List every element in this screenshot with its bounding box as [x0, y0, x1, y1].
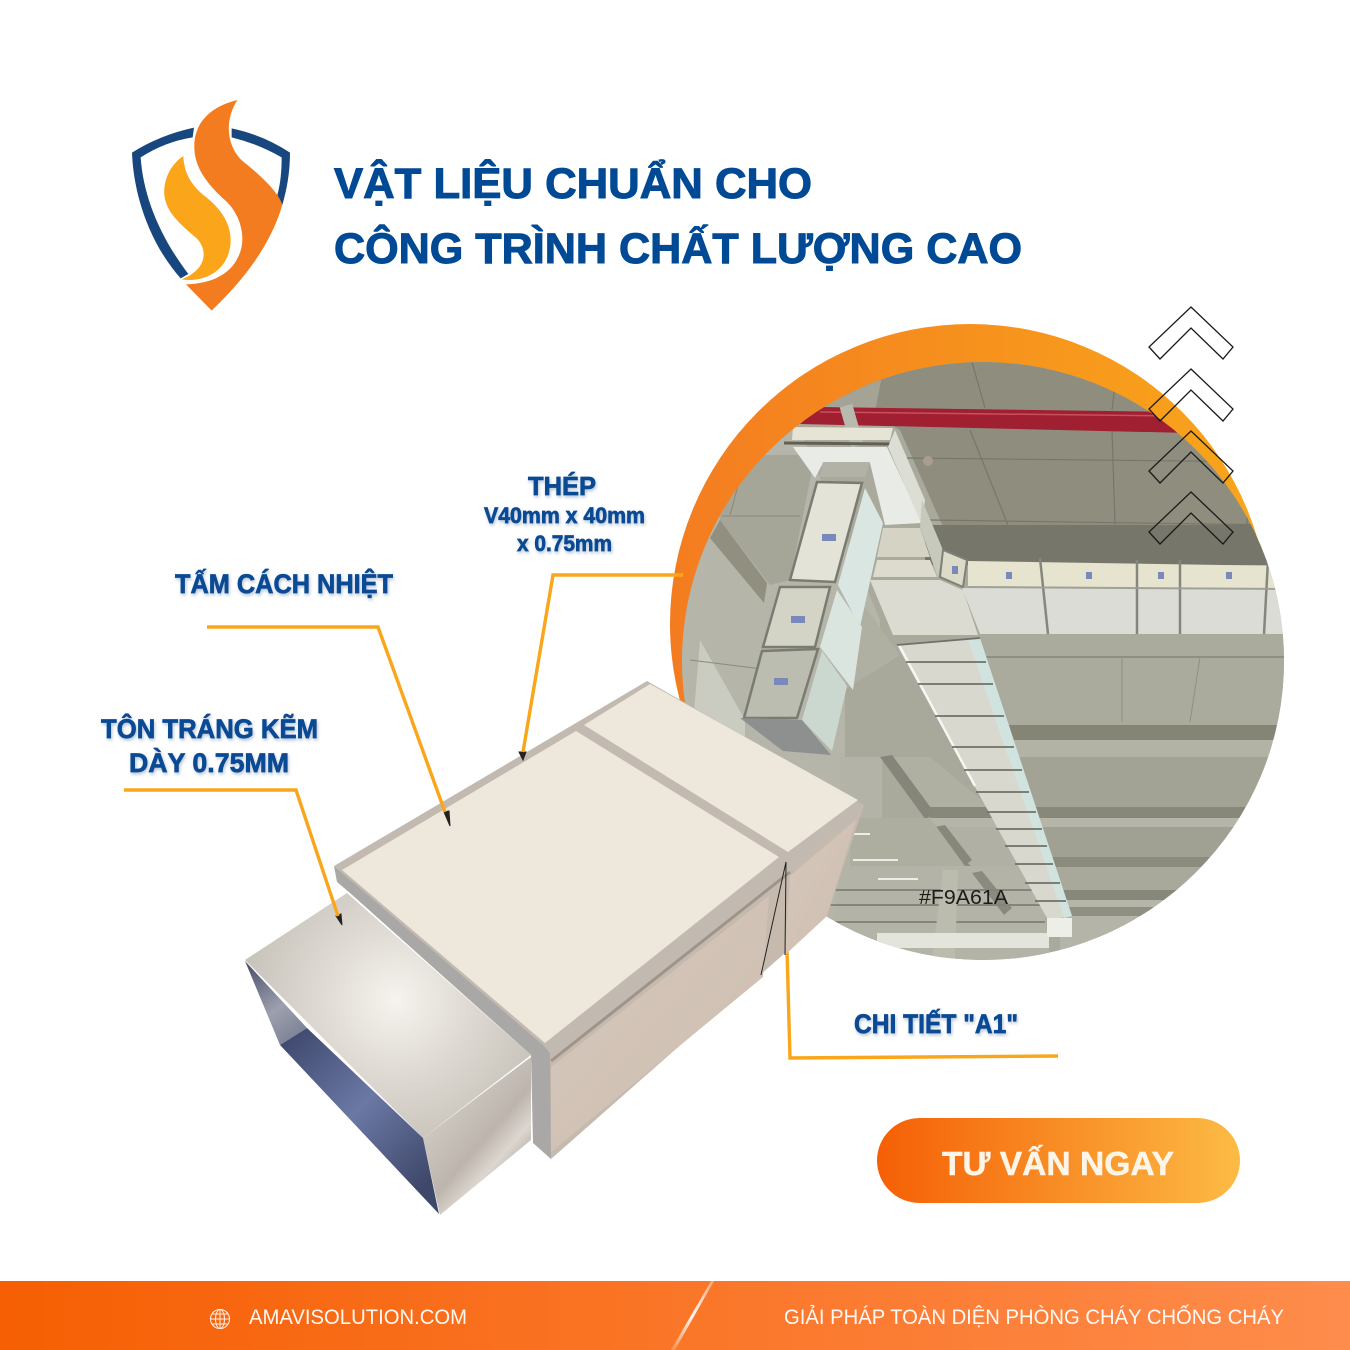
vertical duct segments — [790, 482, 862, 582]
box side panels — [551, 896, 769, 1152]
box side underlay — [543, 805, 864, 1159]
box insulation panel front — [342, 731, 779, 1043]
icon: globe — [210, 1310, 230, 1328]
inner metal duct side — [423, 1057, 531, 1215]
label: tam cach nhiet: TẤM CÁCH NHIỆT — [175, 568, 393, 599]
duct illustration — [245, 681, 864, 1215]
label: thep: V40mm x 40mm — [484, 503, 645, 528]
title — [334, 159, 1022, 273]
pointers — [336, 752, 786, 975]
label: thep: THÉP — [528, 471, 596, 501]
long diagonal duct — [897, 638, 1072, 920]
colour code text: #F9A61A — [919, 887, 1009, 909]
logo — [132, 100, 290, 311]
footer slash — [671, 1281, 714, 1350]
logo shield — [132, 128, 290, 278]
label: ton trang kem — [101, 713, 318, 778]
box end strip — [334, 866, 551, 1159]
inner metal duct bottom wall — [280, 1028, 439, 1214]
label: chi tiet A1: CHI TIẾT "A1" — [854, 1008, 1018, 1039]
left concrete — [670, 430, 880, 960]
button — [877, 1118, 1240, 1203]
label: thep: x 0.75mm — [517, 531, 612, 556]
ceiling upper — [842, 362, 1268, 564]
junction duct — [870, 580, 978, 635]
title: CÔNG TRÌNH CHẤT LƯỢNG CAO — [334, 224, 1022, 273]
logo flame orange — [186, 100, 282, 311]
inner metal duct top — [245, 893, 531, 1138]
foil wrap — [740, 718, 831, 755]
footer website: AMAVISOLUTION.COM — [249, 1306, 467, 1329]
site photo — [670, 350, 1305, 970]
fire pipe — [800, 407, 1190, 433]
box frame top — [334, 681, 864, 1059]
logo flame yellow — [164, 156, 231, 280]
footer bar — [0, 1281, 1350, 1350]
label: ton trang kem: TÔN TRÁNG KẼM — [101, 713, 318, 744]
box insulation panel back — [584, 684, 858, 852]
lower left structure — [845, 692, 958, 757]
upper diagonal duct — [792, 427, 893, 440]
label: ton trang kem: DÀY 0.75MM — [129, 747, 289, 778]
leader line: ton trang kem — [124, 790, 338, 916]
inner metal duct left wall — [245, 961, 307, 1045]
leader line: thep — [523, 575, 683, 752]
button: TƯ VẤN NGAY — [942, 1145, 1174, 1182]
leader line: chi tiet A1 — [787, 950, 1058, 1058]
label: thep — [484, 471, 645, 556]
leader line: tam cach nhiet — [207, 627, 445, 812]
chevron arrows — [1149, 307, 1233, 544]
duct stamps — [774, 534, 1232, 685]
footer slogan: GIẢI PHÁP TOÀN DIỆN PHÒNG CHÁY CHỐNG CHÁY — [784, 1305, 1284, 1329]
orange arc behind photo — [670, 324, 1270, 924]
title: VẬT LIỆU CHUẨN CHO — [334, 159, 812, 208]
concrete bands right — [1277, 634, 1284, 724]
horizontal duct — [968, 561, 1285, 588]
